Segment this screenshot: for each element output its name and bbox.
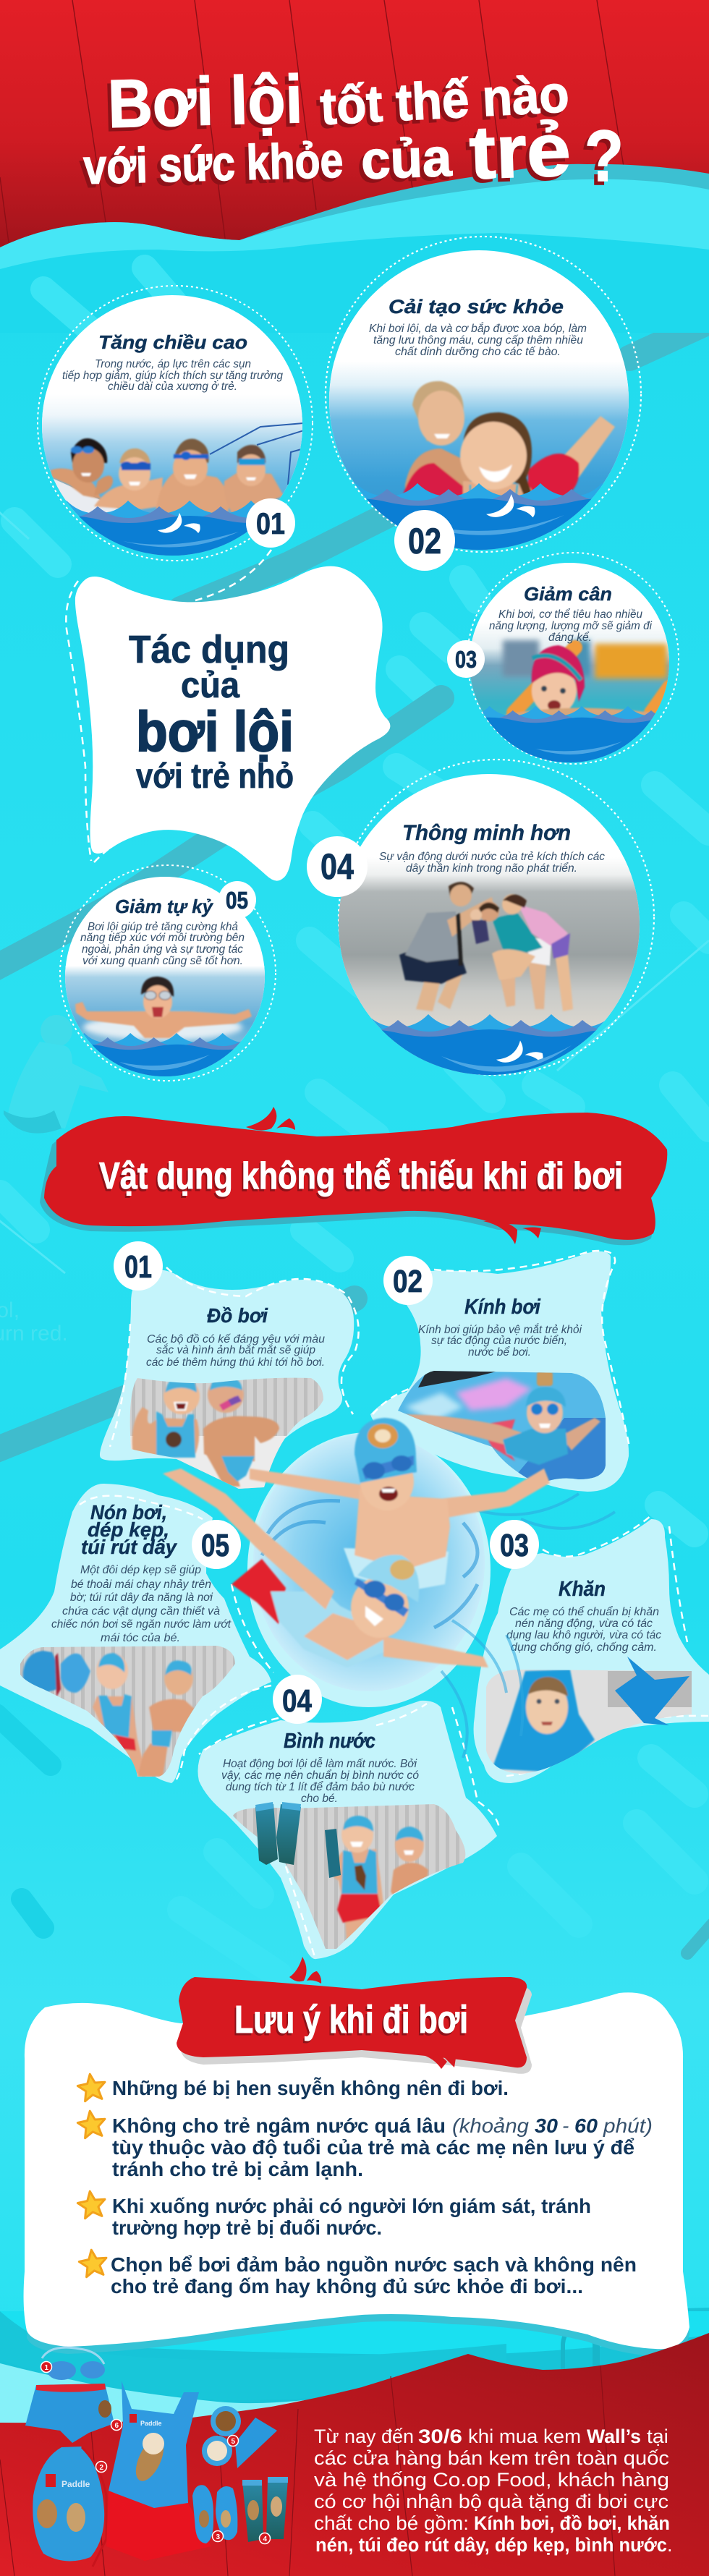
top red wood panel [0,0,709,289]
swim trunks [25,2384,122,2443]
heading [81,1501,177,1558]
title: với sức khỏe [82,133,344,195]
promotional text: 30/6 [418,2426,462,2447]
panel: benefit 02 health [324,236,642,571]
body text: chất dinh dưỡng cho các tế bào. [395,346,561,358]
body text [379,851,605,875]
tip 3: Khi xuống nước phải có người lớn giám sát, tránh [112,2195,591,2217]
panel: item 04 water bottle [198,1701,499,1959]
badge 03: 03 [455,646,477,673]
body text [418,1324,582,1359]
body text: nén năng động, vừa có tác [515,1618,653,1630]
panel: central title blob [66,550,390,881]
heading: Tác dụng của bơi lội với trẻ nhỏ [129,628,294,796]
swimsuit with skirt [106,2381,211,2561]
photo: underwater girl [398,1371,606,1482]
title: của [360,127,453,190]
towel and patches [202,2406,277,2468]
body text: chứa các vật dụng cần thiết và [62,1605,220,1618]
body text: Khi bơi lội, da và cơ bắp được xoa bóp, làm [369,323,587,335]
badge 04 [273,1675,322,1724]
badge 04: 04 [320,846,354,887]
body text: dây thần kinh trong não phát triển. [406,862,577,875]
swim trunks: 6 [114,2422,119,2430]
body text: Hoạt động bơi lội dễ làm mất nước. Bởi [223,1758,417,1770]
panel: benefit 03 weight [447,552,679,765]
promotional text: khi mua kem [468,2426,581,2447]
promotional text: và hệ thống Co.op Food, khách hàng [314,2469,669,2491]
red splashes [246,1107,541,1244]
tip 1 [76,2073,509,2102]
folded towel [615,1657,689,1725]
body text: với xung quanh cũng sẽ tốt hơn. [82,955,243,967]
body text [51,1564,232,1644]
badge 02: 02 [408,521,441,561]
promotional text: nén, túi đeo rút dây, dép kẹp, bình nước [315,2534,667,2556]
heading: Tác dụng của bơi lội với trẻ nhỏ: bơi lội [136,700,294,763]
body text: dụng chống gió, chống cảm. [511,1641,657,1654]
tip 2: 60 [574,2114,598,2137]
body text: bờ; túi rút dây đa năng là nơi [70,1591,213,1604]
body text: vậy, các mẹ nên chuẩn bị bình nước có [221,1769,419,1782]
panel: benefit 01 height [37,285,313,561]
heading: Thông minh hơn [402,821,571,845]
body text: tăng lưu thông máu, cung cấp thêm nhiều [373,334,583,347]
photo: boy in blue towel [481,1664,695,1780]
title: ? [585,116,624,197]
photo: two kids in swimwear [130,1377,323,1489]
footer waves [0,2308,709,2460]
title: Bơi lội [107,61,303,142]
footer red wood panel [0,2333,709,2576]
body text: bé thoải mái chạy nhảy trên [71,1578,211,1591]
bottles: 4 [263,2535,268,2543]
panel: tips [24,1957,689,2356]
flip-flops: 3 [216,2533,220,2541]
panel: item 05 cap, flip-flops, drawstring bag [0,1484,273,1783]
goggles: 1 [45,2364,49,2372]
body text: mái tóc của bé. [101,1632,180,1644]
panel: benefit 04 smarter [307,758,655,1076]
body text: Sự vận động dưới nước của trẻ kích thích các [379,851,605,863]
heading: Tác dụng của bơi lội với trẻ nhỏ: với trẻ nhỏ [136,757,294,796]
body text: dụng lau khô người, vừa có tác [506,1629,661,1641]
promotional text: tại [647,2426,668,2447]
promotional text: Wall’s [587,2426,641,2447]
child two [163,1468,488,1667]
promotional text: Từ nay đến [314,2426,414,2447]
faint background swimmer [4,1015,109,1134]
body text [369,323,587,358]
heading: Đồ bơi [207,1304,268,1327]
pool ladder [563,2328,611,2380]
heading: Tác dụng của bơi lội với trẻ nhỏ: của [181,665,240,705]
body text: Các mẹ có thể chuẩn bị khăn [509,1606,659,1618]
tip 3: trường hợp trẻ bị đuối nước. [112,2216,382,2239]
badge 05: 05 [226,887,248,914]
wave edge under title [0,164,709,333]
two bottles [255,1802,301,1865]
tip 3 [76,2190,591,2239]
heading: Nón bơi, [90,1501,167,1523]
panel: item 01 swimsuit [100,1241,359,1494]
drawstring bag: 2 [100,2464,104,2472]
hero photo: two children diving [163,1418,615,1758]
badge 01: 01 [124,1249,152,1285]
promotional text [314,2426,673,2556]
body text: tiếp hợp giảm, giúp kích thích sự tăng trưởng [62,370,283,382]
promotional text: Kính bơi, đồ bơi, khăn [474,2512,670,2534]
body text: các bé thêm hứng thú khi tới hồ bơi. [146,1356,325,1369]
body text [62,358,283,393]
body text [489,608,653,644]
body text: năng lượng, lượng mỡ sẽ giảm đi [489,620,653,632]
title [82,61,624,197]
body text: Kính bơi giúp bảo vệ mắt trẻ khỏi [418,1324,582,1336]
photo: mother and daughter [329,362,629,550]
body text [80,921,245,967]
body text: nước bể bơi. [468,1346,531,1359]
tip 2: - [562,2114,569,2137]
drawstring bag: Paddle [61,2479,90,2489]
badge 01: 01 [256,506,285,540]
photo: kids with bottle [228,1801,474,1953]
body text: Trong nước, áp lực trên các sụn [95,358,251,370]
promotional text: có cơ hội nhận bộ quà tặng đi bơi cực [314,2491,668,2512]
photo: four kids at pool edge [42,394,302,556]
body text: Khi bơi, cơ thể tiêu hao nhiều [498,608,642,621]
heading: Khăn [559,1578,606,1601]
drawstring bag [33,2447,107,2567]
badge 05 [192,1520,241,1569]
badge 01 [114,1241,163,1291]
child one [250,1418,550,1591]
photo: boy swimming butterfly [65,966,265,1076]
photo: kids with accessories [14,1642,239,1780]
tip 2: phút) [603,2114,653,2137]
tip 2: tránh cho trẻ bị cảm lạnh. [112,2158,363,2180]
prize illustration: swimwear and accessories [25,2347,288,2567]
badge 03 [490,1520,539,1569]
title: trẻ [468,108,572,195]
badge 03: 03 [500,1528,529,1563]
body text: năng tiếp xúc với môi trường bên [80,932,245,944]
panel: item 02 goggles [370,1251,629,1492]
panel: benefit 05 confidence [59,864,276,1081]
tip 2 [76,2109,653,2180]
swimsuit with skirt: Paddle [140,2420,162,2427]
body text: cho bé. [301,1793,338,1805]
title: tốt thế nào [319,65,570,136]
tip 2: tùy thuộc vào độ tuổi của trẻ mà các mẹ nên lưu ý để [112,2136,634,2159]
banner: Lưu ý khi đi bơi [177,1957,532,2074]
tip 2: 30 [535,2114,558,2137]
body text: sự tác động của nước biển, [431,1335,567,1347]
tip 1: Những bé bị hen suyễn không nên đi bơi. [112,2077,509,2099]
body text: Bơi lội giúp trẻ tăng cường khả [88,921,238,933]
towel and patches: 5 [232,2438,236,2446]
banner: Lưu ý khi đi bơi: Lưu ý khi đi bơi [234,1998,468,2041]
heading: Bình nước [284,1730,375,1753]
heading: Giảm cân [524,583,612,605]
body text [146,1333,325,1369]
heading: Tác dụng của bơi lội với trẻ nhỏ: Tác dụng [129,628,289,671]
badge 05: 05 [201,1528,229,1563]
heading: Cải tạo sức khỏe [389,296,564,318]
tip 2: Không cho trẻ ngâm nước quá lâu [112,2114,446,2137]
badge 04 [307,836,368,897]
faint background words [0,1298,68,1346]
heading: Kính bơi [464,1296,541,1319]
body text [506,1606,661,1654]
body text: sắc và hình ảnh bắt mắt sẽ giúp [156,1344,315,1356]
heading: Tăng chiều cao [98,331,247,353]
promotional text: chất cho bé gồm: [314,2512,469,2534]
tip 4: Chọn bể bơi đảm bảo nguồn nước sạch và không nên [111,2253,637,2276]
body text: đáng kể. [548,632,592,644]
badge 03 [447,640,485,678]
body text: ngoài, phản ứng và sự tương tác [82,943,243,956]
body text: Các bộ đồ có kế đáng yêu với màu [147,1333,325,1346]
badge 05 [218,881,256,919]
bottles [242,2477,288,2543]
heading: Giảm tự kỷ [115,896,214,917]
badge 01 [246,498,295,548]
promotional text: các cửa hàng bán kem trên toàn quốc [314,2447,669,2469]
badge 04: 04 [282,1683,312,1719]
body text: Một đôi dép kẹp sẽ giúp [80,1564,201,1576]
heading: dép kẹp, [88,1518,169,1541]
promotional text: . [667,2534,673,2556]
badge 02 [394,510,455,571]
body text [221,1758,419,1805]
flip-flops [192,2485,237,2543]
water droplets [158,513,200,533]
heading: túi rút dây [81,1536,177,1558]
panel: item 03 towel [474,1516,709,1783]
photo: family on the beach [339,857,640,1075]
banner: Vật dụng không thể thiếu khi đi bơi [40,1107,667,1245]
photo: toddler with pink cap [470,622,669,762]
badge 02 [383,1256,433,1305]
badge 02: 02 [393,1264,423,1299]
body text: chiều dài của xương ở trẻ. [108,381,237,393]
goggles [41,2347,105,2380]
tip 4: cho trẻ đang ốm hay không đủ sức khỏe đi bơi... [111,2275,583,2297]
tip 2: (khoảng [452,2114,529,2137]
body text: dung tích từ 1 lít để đảm bảo bù nước [226,1781,415,1793]
body text: chiếc nón bơi sẽ ngăn nước làm ướt [51,1618,232,1631]
tip 4 [77,2248,637,2297]
